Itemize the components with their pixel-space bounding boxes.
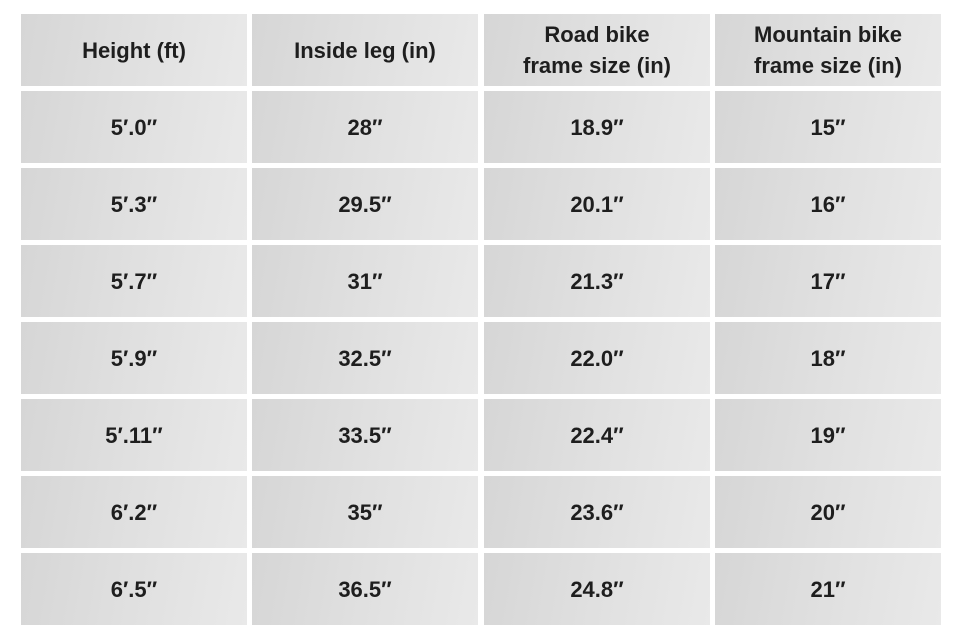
table: bike size chart: 22.0″ — [570, 346, 624, 370]
table: bike size chart: Inside leg (in) — [294, 38, 436, 62]
table: bike size chart: 36.5″ — [338, 576, 392, 602]
row 5 — [21, 399, 941, 471]
table: bike size chart: 17″ — [810, 268, 846, 294]
table: bike size chart: 21.3″ — [570, 268, 624, 294]
row 7 — [21, 553, 941, 625]
table: bike size chart: 28″ — [347, 114, 382, 140]
table: bike size chart: 5′.7″ — [111, 268, 157, 294]
row 6 — [21, 476, 941, 548]
table: bike size chart: 6′.5″ — [111, 576, 157, 602]
table: bike size chart: 18.9″ — [570, 114, 624, 140]
table: bike size chart: 18″ — [810, 346, 846, 370]
table: bike size chart: 20.1″ — [570, 192, 624, 216]
table: bike size chart: Road bike — [544, 22, 650, 47]
table: bike size chart: frame size (in) — [754, 53, 902, 78]
table: bike size chart: 29.5″ — [338, 192, 392, 216]
table: bike size chart: 19″ — [810, 422, 846, 448]
header row — [21, 14, 941, 86]
table: bike size chart: 5′.11″ — [105, 422, 163, 448]
table: bike size chart: 24.8″ — [570, 576, 624, 602]
table: bike size chart: 22.4″ — [570, 422, 624, 448]
row 1 — [21, 91, 941, 163]
table: bike size chart: 32.5″ — [338, 346, 392, 370]
table: bike size chart: 20″ — [810, 500, 846, 524]
table: bike size chart: 6′.2″ — [111, 500, 157, 524]
table: bike size chart: 33.5″ — [338, 422, 392, 448]
table: bike size chart: frame size (in) — [523, 53, 671, 78]
table: bike size chart: 16″ — [810, 192, 846, 216]
row 3 — [21, 245, 941, 317]
table: bike size chart: 35″ — [347, 500, 382, 524]
row 2 — [21, 168, 941, 240]
table: bike size chart: 5′.9″ — [111, 346, 157, 370]
table: bike size chart: 15″ — [810, 114, 846, 140]
table: bike size chart: 23.6″ — [570, 500, 624, 524]
row 4 — [21, 322, 941, 394]
table: bike size chart: Height (ft) — [82, 38, 186, 62]
table: bike size chart: 21″ — [810, 576, 846, 602]
table: bike size chart: 5′.0″ — [111, 114, 157, 140]
table: bike size chart: Mountain bike — [754, 22, 902, 47]
table: bike size chart: 5′.3″ — [111, 192, 157, 216]
table: bike size chart: 31″ — [347, 268, 382, 294]
